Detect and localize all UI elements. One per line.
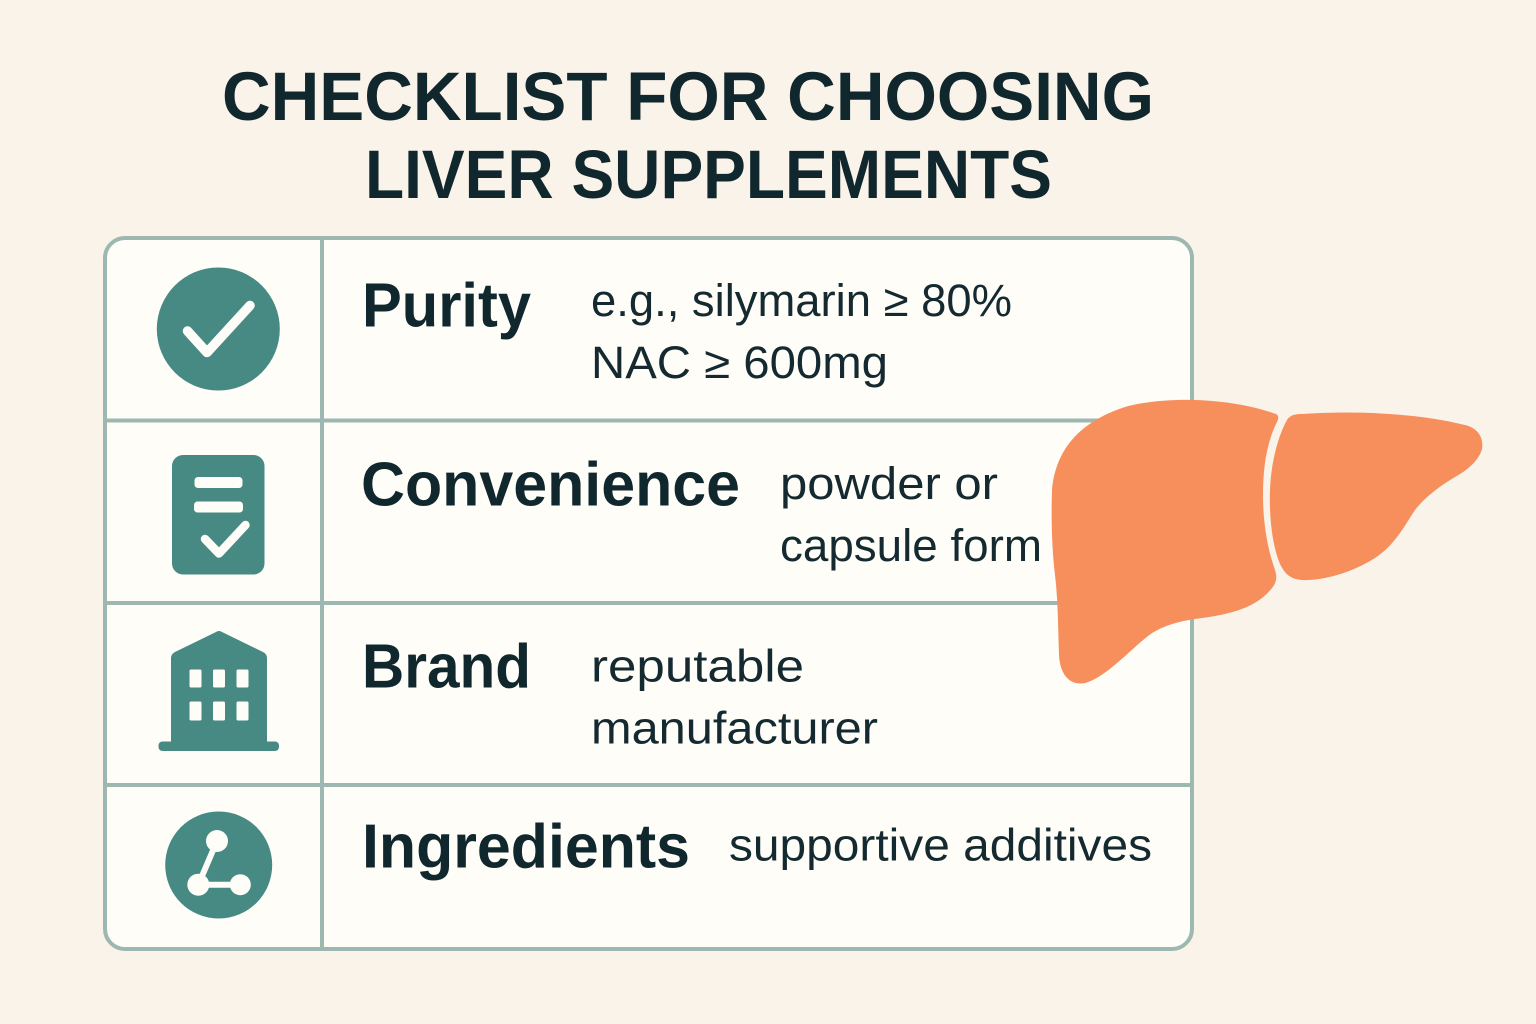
purity heading: Purity xyxy=(362,272,531,340)
icon: check circle xyxy=(157,268,280,390)
row: convenience xyxy=(172,450,1042,574)
icon: molecule xyxy=(165,812,272,918)
icon: building xyxy=(158,631,279,751)
ingredients heading: Ingredients xyxy=(362,812,690,882)
title: CHECKLIST FOR CHOOSING xyxy=(222,58,1154,135)
icon: clipboard check xyxy=(172,455,264,574)
brand description xyxy=(591,640,878,754)
title: LIVER SUPPLEMENTS xyxy=(365,136,1052,213)
icon: liver xyxy=(1052,400,1482,683)
ingredients description: supportive additives xyxy=(729,820,1152,870)
purity description: NAC ≥ 600mg xyxy=(591,337,888,388)
brand description: reputable xyxy=(591,640,804,692)
row: purity xyxy=(157,268,1012,390)
brand description: manufacturer xyxy=(591,702,878,754)
convenience description: powder or xyxy=(780,458,998,509)
title xyxy=(222,58,1154,213)
row: brand xyxy=(158,631,878,754)
purity description: e.g., silymarin ≥ 80% xyxy=(591,275,1012,326)
purity description xyxy=(591,275,1012,388)
panel: checklist table xyxy=(105,238,1192,949)
convenience description xyxy=(780,458,1042,571)
convenience description: capsule form xyxy=(780,520,1042,571)
convenience heading: Convenience xyxy=(361,450,740,520)
brand heading: Brand xyxy=(362,632,531,702)
row: ingredients xyxy=(165,812,1152,918)
